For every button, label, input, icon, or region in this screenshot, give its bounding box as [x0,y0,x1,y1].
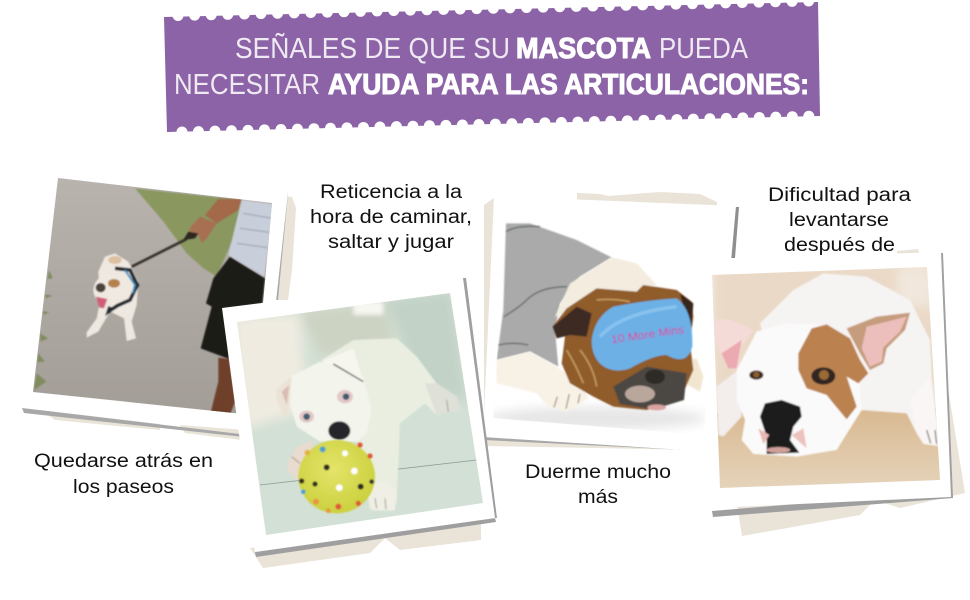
title line 1: MASCOTA [516,33,651,65]
photo card 2: puppy with ball [222,278,497,557]
caption: lagging behind: los paseos [73,477,174,498]
caption: lagging behind [34,451,213,498]
photo: white puppy [276,338,461,511]
photo: bulldog on leash [87,253,138,341]
mask lettering: 10 More Mins [610,324,685,346]
photo card 3: sleeping dog [483,196,739,452]
caption: lagging behind: Quedarse atrás en [34,451,213,472]
title line 1: SEÑALES DE QUE SU [235,31,510,65]
caption: difficulty getting up: después de [784,235,895,256]
title line 2: NECESITAR [174,69,320,101]
photo: warm floor [712,267,936,416]
photo: yellow toy ball [298,440,375,513]
title line 1: PUEDA [659,33,749,65]
caption: difficulty getting up: levantarse [789,210,889,231]
caption: reluctance: saltar y jugar [328,232,455,253]
photo: pavement and grass [30,175,280,425]
caption: difficulty getting up: Dificultad para [768,185,912,206]
caption: reluctance: Reticencia a la [320,182,462,203]
photo: white and brown dog [714,273,940,457]
photo: bulldog head with sleep mask [497,257,703,412]
title line 2: AYUDA PARA LAS ARTICULACIONES: [328,69,809,101]
beige paper backings [40,192,965,568]
photo: floor and wall [237,293,483,535]
caption: sleeps more [525,462,671,508]
title banner [164,1,820,132]
photo: white studio backdrop [487,407,707,430]
photo card 4: resting dog [710,252,953,517]
photo: person walking the dog [132,199,273,415]
caption: reluctance: hora de caminar, [310,207,472,228]
photo card 1: dog on leash [22,174,288,437]
caption: sleeps more: Duerme mucho [525,462,671,483]
caption: difficulty getting up [768,185,912,256]
photo: grey shirt [497,223,612,367]
caption: sleeps more: más [578,487,618,508]
caption: reluctance [310,182,472,253]
